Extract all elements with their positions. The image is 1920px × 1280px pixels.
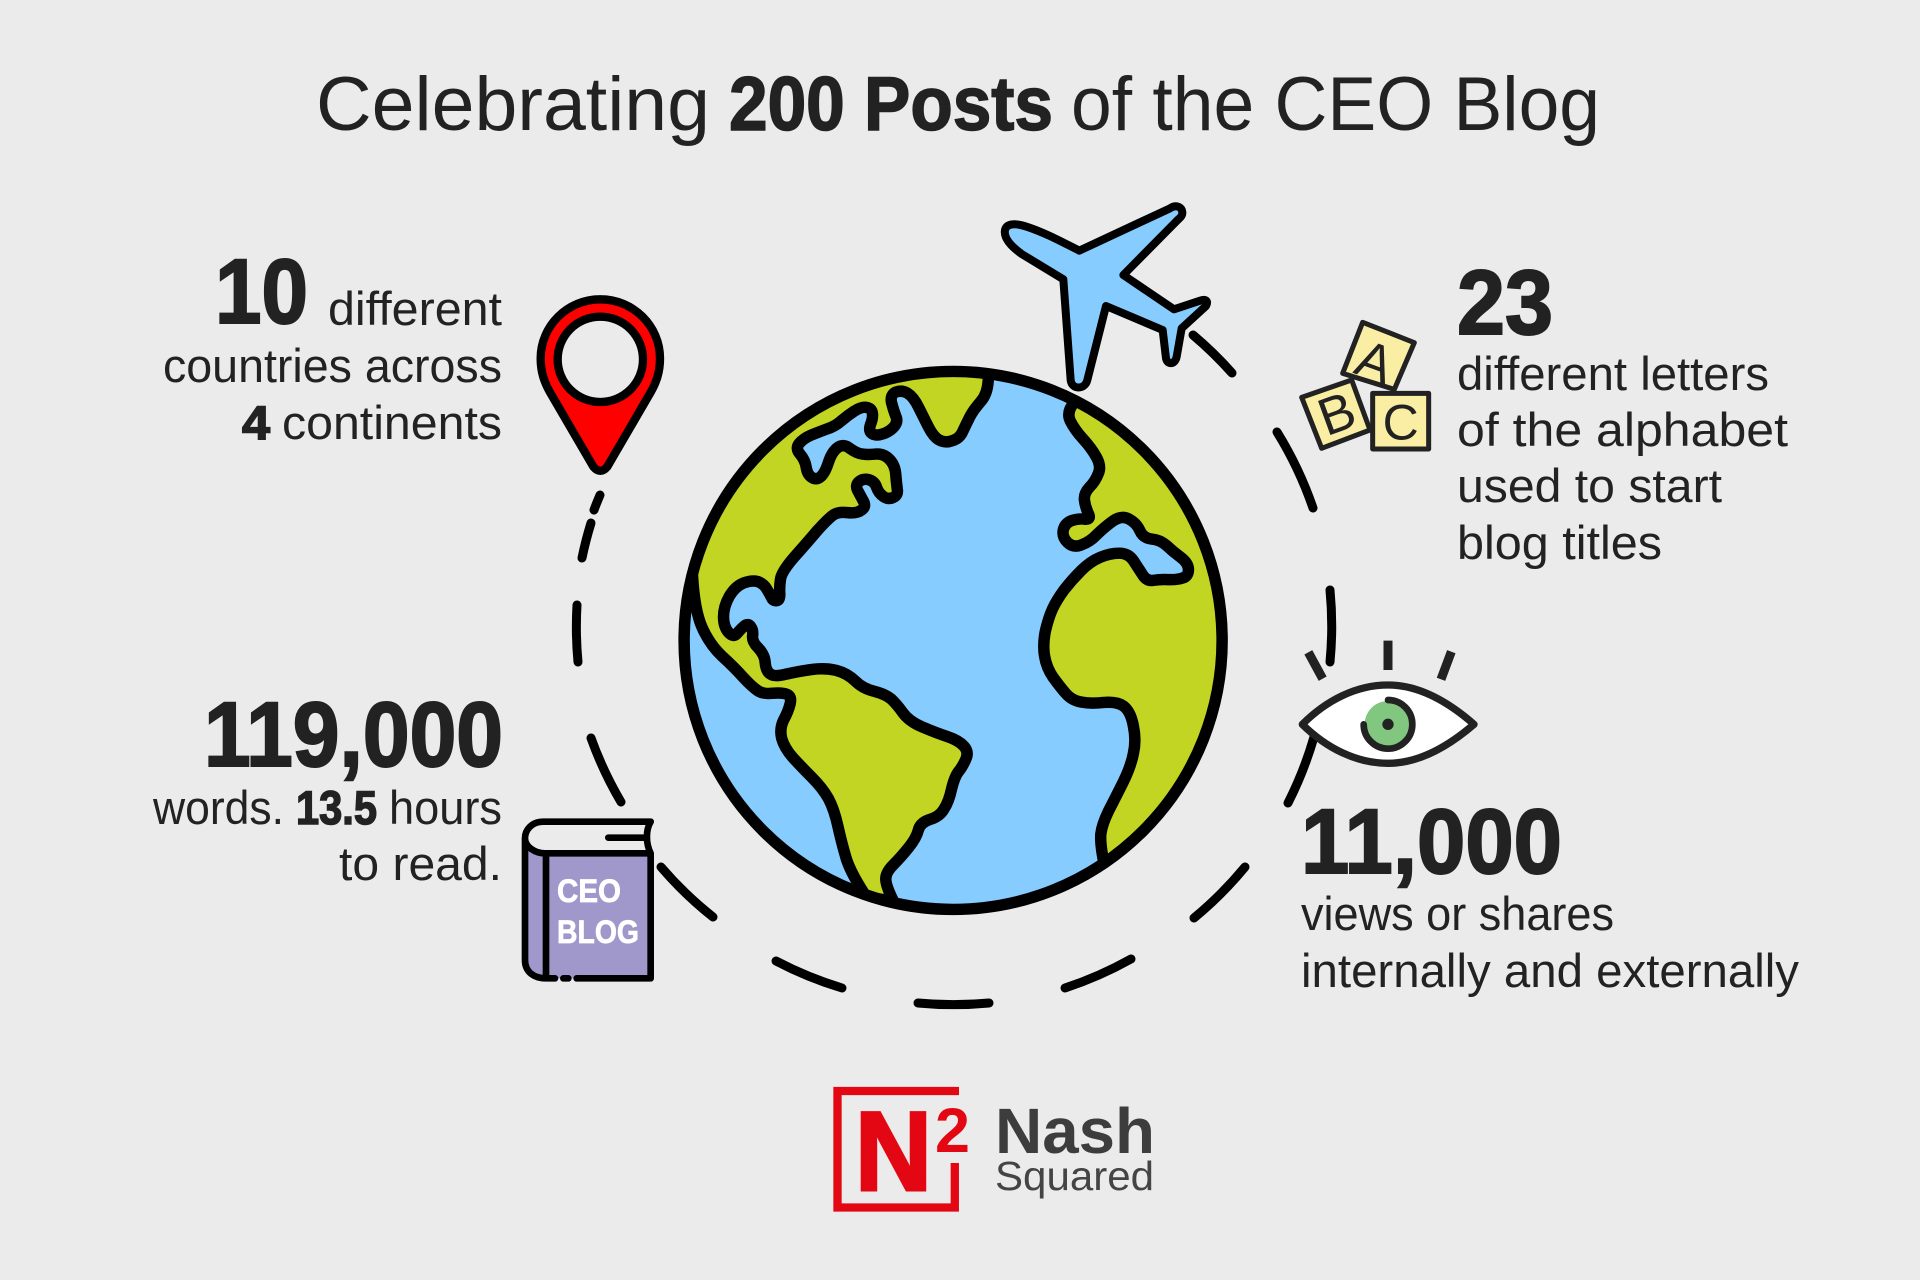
stat: 119,000 words (152, 684, 503, 890)
stat: 119,000 words: 119,000 (204, 684, 503, 786)
stat: 10 countries: different (328, 282, 502, 335)
stat: 119,000 words: 13.5 (296, 781, 377, 834)
stat: 10 countries: 10 (215, 241, 308, 343)
stat: 11,000 views: 11,000 (1301, 791, 1562, 893)
icon: map pin (541, 299, 660, 471)
icon: CEO blog book: BLOG (557, 914, 639, 950)
stat: 119,000 words: hours (389, 781, 502, 834)
title: of the CEO Blog (1071, 62, 1600, 147)
stat: 11,000 views (1301, 791, 1799, 997)
title: 200 Posts (729, 62, 1053, 147)
stat: 23 letters (1457, 252, 1788, 569)
stat: 23 letters: blog titles (1457, 516, 1662, 569)
icon: alphabet blocks: C (1383, 394, 1419, 450)
stat: 119,000 words: words. (152, 781, 284, 834)
icon: CEO blog book (525, 822, 651, 978)
icon: globe (678, 366, 1228, 916)
stat: 10 countries: 4 (242, 396, 270, 449)
logo: Nash Squared: N (855, 1089, 932, 1214)
stat: 23 letters: 23 (1457, 252, 1553, 354)
icon: alphabet blocks: A (1348, 328, 1402, 396)
stat: 10 countries: countries across (163, 339, 502, 392)
stat: 119,000 words: to read. (339, 837, 502, 890)
icon: CEO blog book: CEO (557, 873, 621, 909)
logo: Nash Squared: Nash (995, 1095, 1155, 1167)
icon: alphabet blocks (1302, 322, 1429, 450)
dashed orbit path (576, 335, 1332, 1005)
title (316, 62, 1600, 147)
icon: airplane (1005, 206, 1207, 387)
stat: 10 countries (163, 241, 502, 449)
stat: 11,000 views: internally and externally (1301, 944, 1799, 997)
logo: Nash Squared (838, 1089, 1155, 1214)
logo: Nash Squared: Squared (995, 1153, 1154, 1199)
logo: Nash Squared: 2 (935, 1096, 970, 1166)
stat: 11,000 views: views or shares (1301, 887, 1614, 940)
title: Celebrating (316, 62, 710, 147)
icon: eye (1302, 641, 1474, 763)
stat: 10 countries: continents (282, 396, 502, 449)
stat: 23 letters: used to start (1457, 459, 1722, 512)
icon: alphabet blocks: B (1310, 380, 1364, 448)
stat: 23 letters: different letters (1457, 347, 1769, 400)
stat: 23 letters: of the alphabet (1457, 403, 1788, 456)
